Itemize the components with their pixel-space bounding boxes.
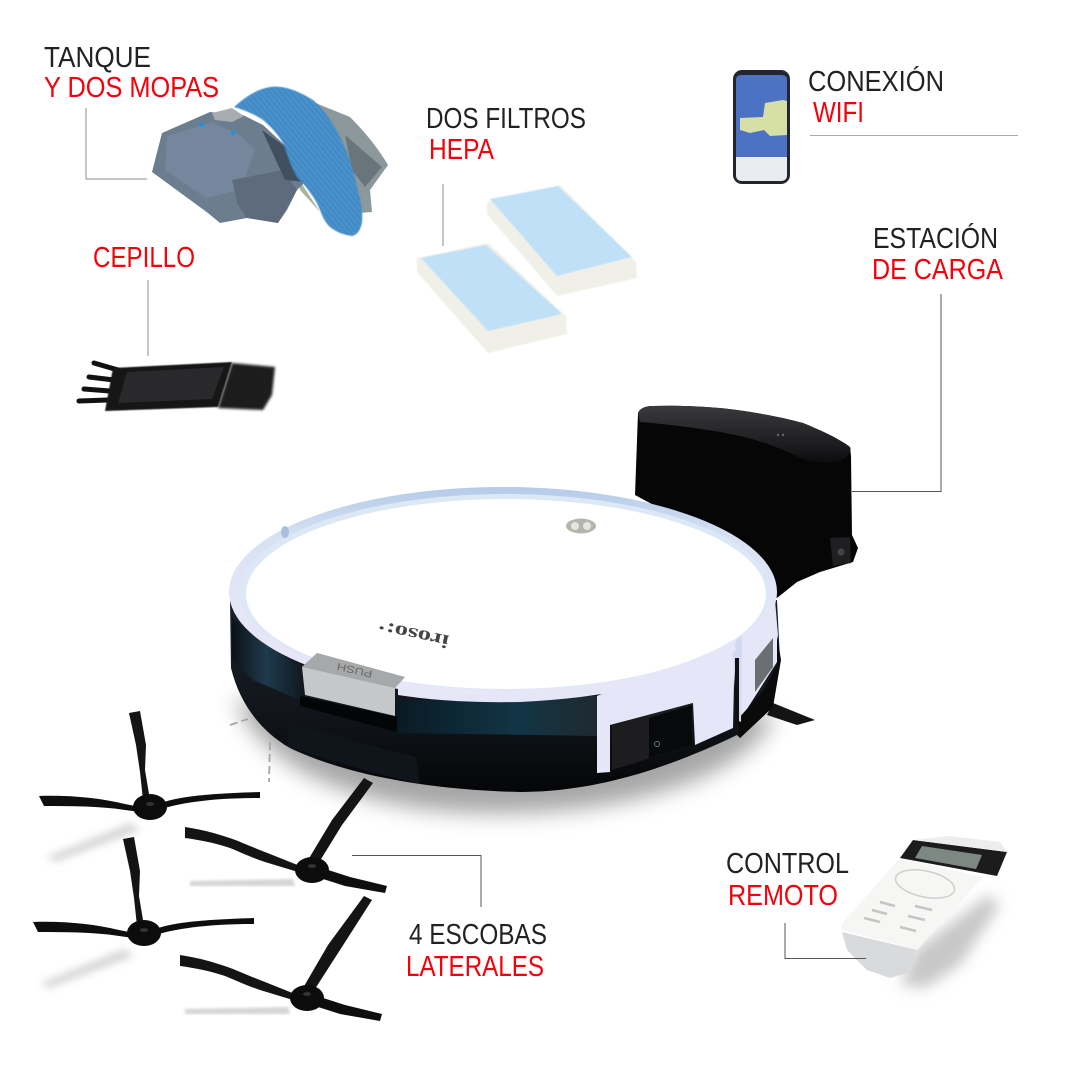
label: conexión wifi: CONEXIÓN [808, 65, 944, 98]
leader line: cepillo [147, 280, 149, 356]
image: water tank and mop [152, 87, 388, 236]
blue-tinted window front [397, 696, 597, 736]
label: cepillo: CEPILLO [93, 242, 195, 274]
white lid [246, 499, 766, 689]
robot dark body [230, 600, 780, 792]
image: two HEPA filters [417, 185, 637, 353]
side reflection [232, 618, 300, 700]
label: conexión wifi: WIFI [813, 97, 864, 129]
image: robot vacuum [229, 487, 815, 792]
label: control remoto: CONTROL [726, 848, 849, 880]
image: charging dock [635, 406, 858, 598]
switch detail [649, 705, 692, 758]
black lower right edge [737, 635, 781, 738]
label: conexión wifi [808, 65, 944, 129]
leader line: escobas [352, 856, 481, 907]
label: 4 escobas laterales [406, 919, 547, 983]
label: estación de carga: ESTACIÓN [873, 222, 998, 255]
leader line: wifi [810, 134, 1018, 136]
push button [302, 653, 405, 716]
side lavender panel [740, 600, 778, 720]
switch panel [612, 703, 693, 770]
label: 4 escobas laterales: LATERALES [406, 951, 544, 983]
label: tanque y dos mopas [44, 42, 219, 104]
image: remote control [841, 836, 1007, 988]
icon: smartphone [733, 70, 790, 184]
strip under push [300, 696, 397, 732]
label: estación de carga [872, 222, 1004, 286]
floor shadow [235, 700, 775, 813]
leader line: estación [852, 294, 941, 492]
power button [566, 518, 596, 534]
dashed motion marks [230, 719, 270, 782]
leader line: filtros [442, 184, 444, 246]
front door panel [288, 722, 420, 784]
label: control remoto [726, 848, 849, 912]
bristle behind robot [767, 703, 815, 725]
label: tanque y dos mopas: Y DOS MOPAS [44, 72, 219, 104]
front rim bottom band [398, 640, 736, 702]
label: dos filtros hepa [426, 103, 586, 166]
label: dos filtros hepa: DOS FILTROS [426, 103, 586, 135]
push text: PUSH [336, 660, 374, 679]
image: four side brushes [33, 711, 387, 1021]
image: cleaning brush [79, 362, 275, 411]
inner rim [240, 494, 770, 690]
label: control remoto: REMOTO [728, 880, 838, 912]
side separator [733, 636, 742, 722]
label: dos filtros hepa: HEPA [429, 134, 495, 166]
leader line: tanque [86, 108, 147, 179]
side brush 1 [39, 711, 260, 862]
side brush 4 [180, 896, 382, 1021]
side window [755, 638, 773, 692]
label: estación de carga: DE CARGA [872, 254, 1004, 286]
side brush 3 [33, 837, 254, 988]
blue bump [281, 526, 289, 538]
lavender rear panel [597, 636, 735, 773]
lavender rim [229, 487, 777, 697]
push button top facet [302, 653, 405, 688]
label: 4 escobas laterales: 4 ESCOBAS [409, 919, 547, 951]
leader line: control [785, 923, 866, 958]
label: tanque y dos mopas: TANQUE [44, 42, 151, 74]
logo: iroso:· [375, 616, 451, 652]
side brush 2 [185, 778, 387, 893]
